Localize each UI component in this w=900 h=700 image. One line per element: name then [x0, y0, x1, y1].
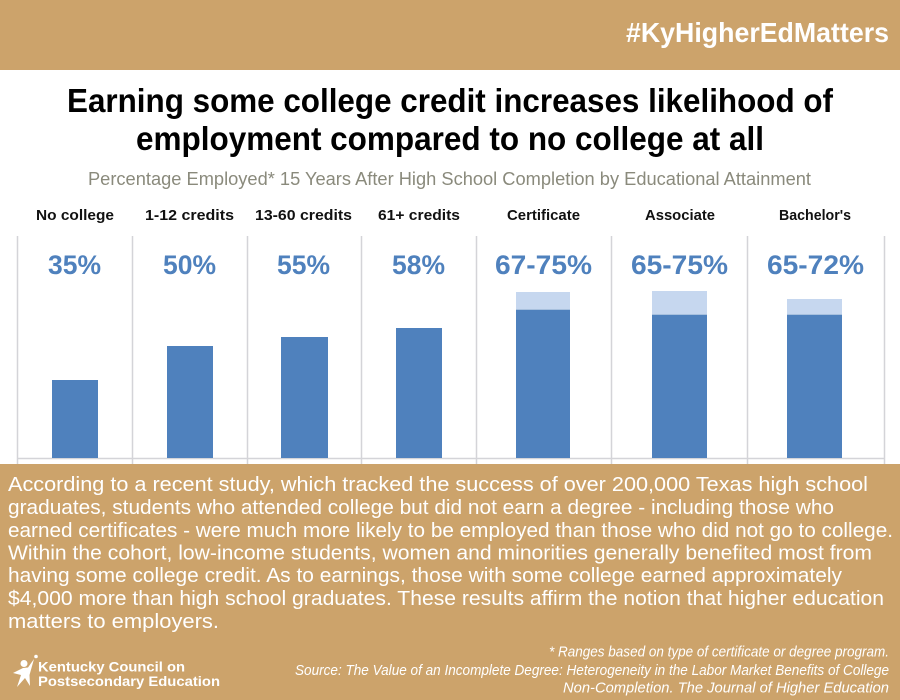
footnotes: Non-Completion. The Journal of Higher Education: [563, 680, 889, 696]
organization name: Postsecondary Education: [38, 673, 220, 689]
bottom panel: [0, 464, 900, 700]
percentage values: 65-75%: [631, 250, 728, 280]
subtitle: Percentage Employed* 15 Years After High School Completion by Educational Attainment: [88, 168, 811, 189]
bars: [52, 310, 842, 458]
percentage values: 50%: [163, 250, 216, 280]
title: employment compared to no college at all: [136, 120, 764, 157]
header band: [0, 0, 900, 70]
body text: According to a recent study, which tracked the success of over 200,000 Texas high school: [8, 473, 868, 496]
body text: graduates, students who attended college but did not earn a degree - including those who: [8, 496, 834, 519]
logo: Kentucky Council on Postsecondary Education: [13, 655, 220, 689]
column headings: Associate: [645, 207, 715, 224]
icon: figure reaching up: [13, 655, 38, 687]
column headings: 61+ credits: [378, 207, 460, 224]
column headings: Certificate: [507, 207, 580, 224]
body text: [8, 473, 893, 633]
percentage values: 67-75%: [495, 250, 592, 280]
percentage values: 55%: [277, 250, 330, 280]
body text: matters to employers.: [8, 610, 219, 633]
percentage values: 58%: [392, 250, 445, 280]
percentage values: 35%: [48, 250, 101, 280]
column headings: 13-60 credits: [255, 207, 352, 224]
body text: having some college credit. As to earnings, those with some college earned approximately: [8, 564, 843, 587]
percentage values: 65-72%: [767, 250, 864, 280]
organization name: [38, 658, 220, 689]
title: Earning some college credit increases likelihood of: [67, 82, 834, 119]
column headings: Bachelor's: [779, 207, 851, 224]
organization name: Kentucky Council on: [38, 658, 185, 674]
column headings: No college: [36, 207, 114, 224]
body text: $4,000 more than high school graduates. These results affirm the notion that higher education: [8, 587, 884, 610]
title: [67, 82, 834, 157]
column headings: [36, 207, 851, 224]
percentage values: [48, 250, 864, 280]
body text: Within the cohort, low-income students, women and minorities generally benefited most from: [8, 542, 872, 564]
footnotes: [295, 644, 889, 696]
hashtag: #KyHigherEdMatters: [626, 17, 889, 48]
body text: earned certificates - were much more likely to be employed than those who did not go to college.: [8, 519, 893, 542]
bar chart: [17, 236, 885, 464]
column headings: 1-12 credits: [145, 207, 234, 224]
range bars: [516, 291, 842, 314]
